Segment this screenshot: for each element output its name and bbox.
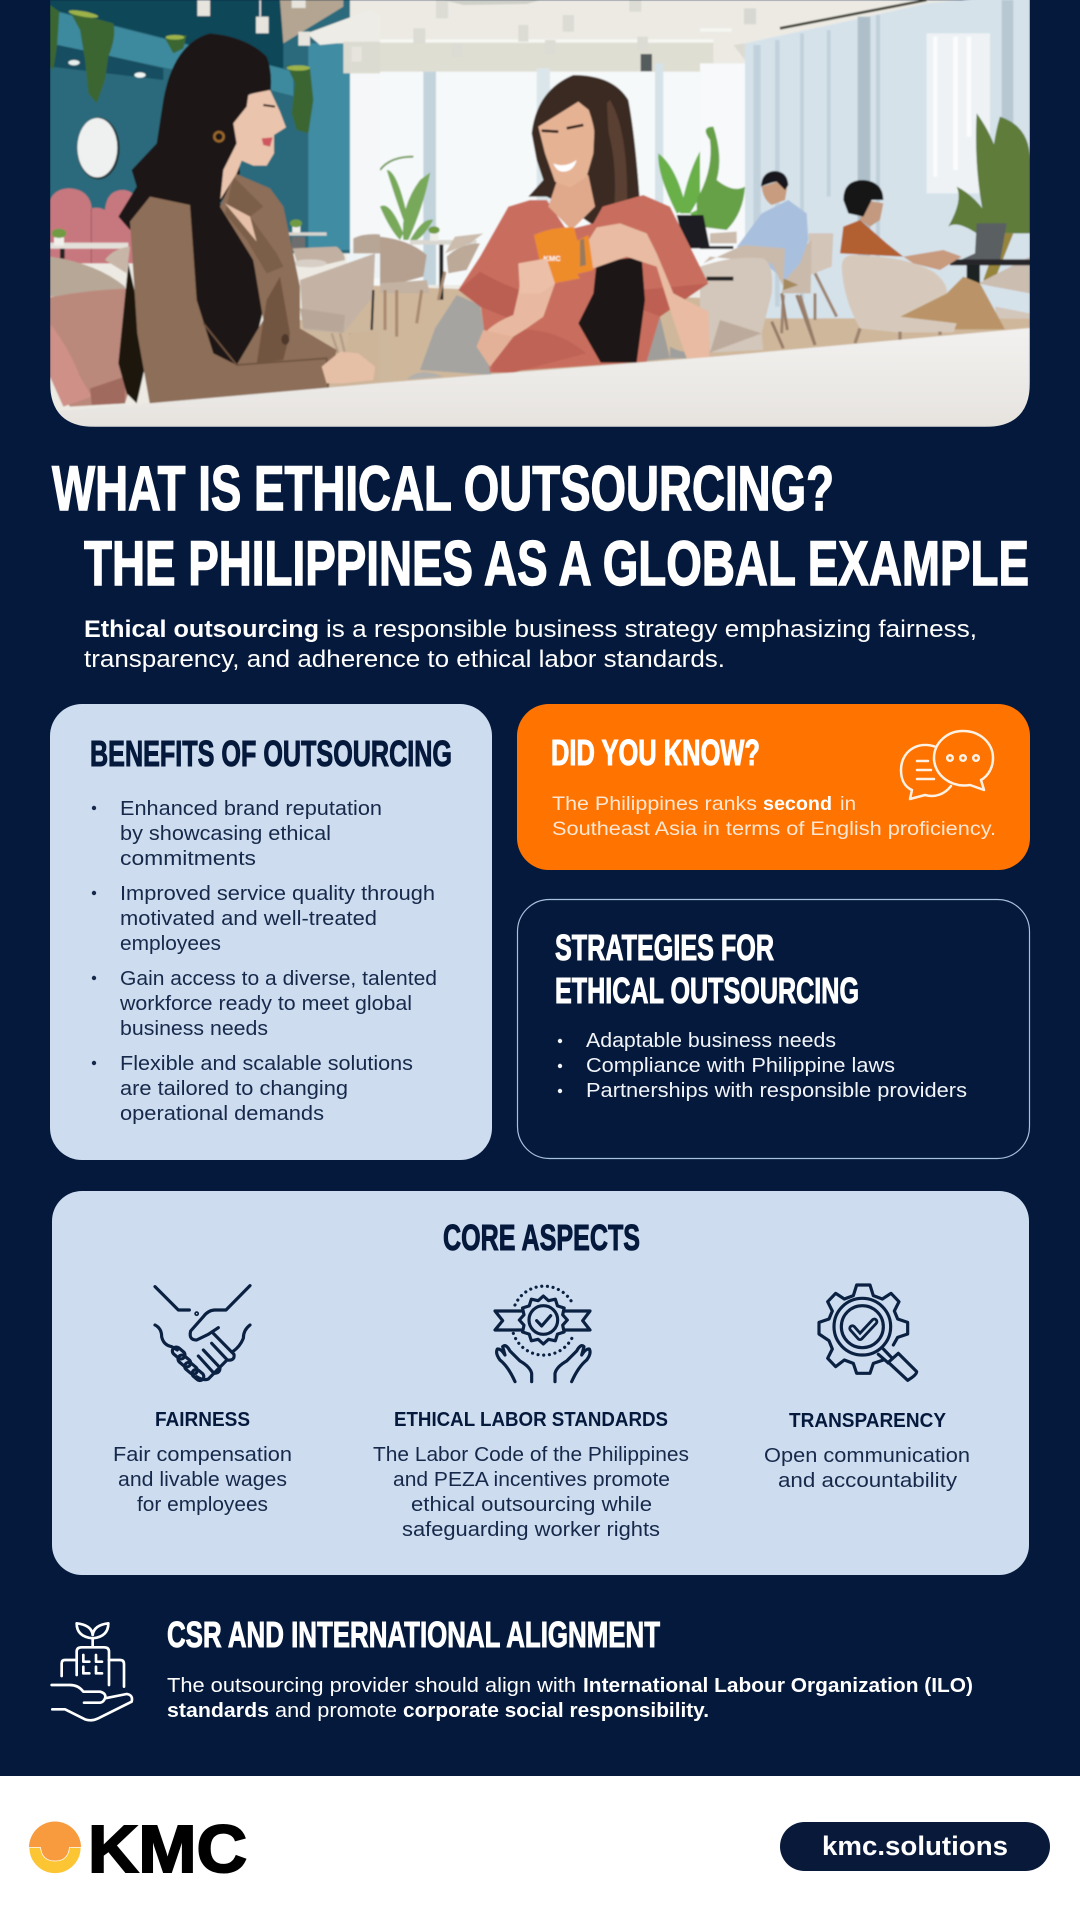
pink chair bbox=[50, 288, 137, 407]
panel: benefits of outsourcing bbox=[50, 704, 492, 1160]
heading: did you know: DID YOU KNOW? bbox=[551, 732, 760, 773]
hair behind bbox=[528, 75, 642, 230]
strategies bullet list: Partnerships with responsible providers bbox=[586, 1080, 967, 1102]
laptop at blue shirt man bbox=[700, 217, 708, 247]
floor bbox=[354, 285, 1030, 383]
did you know fact bbox=[552, 793, 996, 840]
hero photo: two women talking in a cafe-style office bbox=[50, 0, 1030, 427]
did you know fact: second bbox=[763, 793, 832, 815]
center woman and chair bbox=[380, 75, 710, 379]
teal wall section bbox=[50, 0, 380, 263]
center woman and chair: KMC bbox=[543, 254, 561, 263]
heading: benefits: BENEFITS OF OUTSOURCING bbox=[90, 733, 452, 774]
benefits bullet list: Enhanced brand reputation bbox=[120, 798, 382, 820]
intro paragraph: Ethical outsourcing bbox=[84, 616, 319, 643]
heading: strategies bbox=[555, 927, 859, 1011]
CSR paragraph: corporate social responsibility. bbox=[403, 1700, 709, 1722]
item: fairness: Fair compensation bbox=[113, 1444, 292, 1466]
CSR paragraph: and promote bbox=[275, 1700, 397, 1722]
benefits bullet list: employees bbox=[120, 933, 221, 955]
plant in left window bbox=[380, 170, 433, 240]
icon: gear with magnifying glass and check bbox=[819, 1285, 917, 1380]
grey chair bbox=[420, 295, 492, 375]
neck and face bbox=[548, 175, 595, 230]
item: ethical labor standards: ETHICAL LABOR STANDARDS bbox=[394, 1409, 668, 1431]
back chairs bbox=[808, 233, 833, 275]
benefits bullet list: are tailored to changing bbox=[120, 1078, 348, 1100]
face bbox=[219, 88, 287, 200]
did you know fact: in bbox=[840, 793, 856, 815]
item: ethical labor standards: The Labor Code of the Philippines bbox=[373, 1444, 689, 1466]
wall mirror bbox=[77, 117, 120, 179]
CSR paragraph: standards bbox=[167, 1700, 269, 1722]
icon: certified medal held by hands bbox=[495, 1286, 590, 1382]
CSR paragraph: The outsourcing provider should align with bbox=[167, 1675, 576, 1697]
white table bbox=[149, 327, 1030, 406]
CSR paragraph bbox=[167, 1675, 973, 1722]
panel: did you know bbox=[517, 704, 1030, 870]
footer band bbox=[0, 1776, 1080, 1920]
CSR paragraph: International Labour Organization (ILO) bbox=[583, 1675, 973, 1697]
strategies bullet list: Compliance with Philippine laws bbox=[586, 1055, 895, 1077]
laptop behind bbox=[677, 215, 710, 248]
benefits bullet list: Improved service quality through bbox=[120, 883, 435, 905]
icon: plant, building and hand bbox=[52, 1623, 132, 1720]
hanging plants bbox=[50, 5, 313, 133]
item: fairness: FAIRNESS bbox=[155, 1409, 250, 1431]
KMC logo: KMC bbox=[88, 1812, 247, 1887]
hands bbox=[322, 352, 375, 383]
item: fairness bbox=[113, 1409, 292, 1516]
strategies bullet list: Adaptable business needs bbox=[586, 1030, 836, 1052]
long hair bbox=[578, 257, 645, 363]
benefits bullet list: commitments bbox=[120, 848, 256, 870]
back chairs and table bbox=[380, 237, 427, 290]
item: ethical labor standards: safeguarding worker rights bbox=[402, 1519, 660, 1541]
benefits bullet list: workforce ready to meet global bbox=[119, 993, 412, 1015]
curtain section bbox=[697, 0, 1030, 353]
item: fairness: for employees bbox=[137, 1494, 268, 1516]
chairs behind left woman bbox=[50, 257, 125, 298]
chair front bbox=[700, 258, 772, 353]
item: ethical labor standards bbox=[373, 1409, 689, 1541]
orange shirt man pants and chair bbox=[900, 277, 1005, 329]
item: transparency: TRANSPARENCY bbox=[789, 1410, 947, 1432]
pink bench bbox=[50, 188, 136, 263]
item: ethical labor standards: and PEZA incentives promote bbox=[393, 1469, 670, 1491]
front hair lock bbox=[588, 104, 609, 131]
heading: strategies: ETHICAL OUTSOURCING bbox=[555, 970, 859, 1011]
website pill bbox=[780, 1822, 1050, 1871]
panel: strategies for ethical outsourcing bbox=[518, 900, 1030, 1158]
KMC logo bbox=[29, 1812, 247, 1887]
benefits bullet list: business needs bbox=[120, 1018, 268, 1040]
benefits bullet list: operational demands bbox=[120, 1103, 324, 1125]
heading: core aspects: CORE ASPECTS bbox=[443, 1217, 640, 1258]
item: fairness: and livable wages bbox=[118, 1469, 287, 1491]
benefits bullet list: by showcasing ethical bbox=[120, 823, 331, 845]
laptop at orange shirt man bbox=[957, 223, 1007, 262]
heading: CSR and international alignment: CSR AND INTERNATIONAL ALIGNMENT bbox=[167, 1614, 660, 1655]
man in blue shirt bbox=[737, 200, 808, 280]
plant in right window bbox=[657, 151, 702, 216]
item: transparency: Open communication bbox=[764, 1445, 970, 1467]
intro paragraph: is a responsible business strategy emphasizing fairness, bbox=[326, 616, 977, 643]
right arm bbox=[583, 223, 710, 358]
did you know fact: The Philippines ranks bbox=[552, 793, 757, 815]
blouse bbox=[458, 195, 708, 373]
strategies bullet list bbox=[558, 1030, 967, 1102]
icon: handshake bbox=[155, 1286, 250, 1382]
item: ethical labor standards: ethical outsourcing while bbox=[411, 1494, 652, 1516]
intro paragraph bbox=[84, 616, 977, 673]
website pill: kmc.solutions bbox=[822, 1831, 1008, 1861]
item: transparency bbox=[764, 1410, 970, 1492]
benefits bullet list: motivated and well-treated bbox=[120, 908, 377, 930]
item: transparency: and accountability bbox=[778, 1470, 957, 1492]
palm plant bbox=[948, 113, 1030, 233]
title bbox=[52, 454, 1029, 599]
back hair bbox=[118, 33, 271, 365]
heading: strategies: STRATEGIES FOR bbox=[555, 927, 774, 968]
benefits bullet list: Flexible and scalable solutions bbox=[120, 1053, 413, 1075]
left section foreground bbox=[50, 33, 380, 407]
did you know fact: Southeast Asia in terms of English proficiency. bbox=[552, 818, 996, 840]
icon: chat bubbles bbox=[901, 731, 993, 799]
benefits bullet list bbox=[92, 798, 437, 1125]
panel: core aspects bbox=[52, 1191, 1029, 1575]
window and ceiling section bbox=[347, 0, 713, 285]
forearm and mug hand bbox=[486, 284, 556, 338]
jacket bbox=[130, 173, 337, 405]
orange mug bbox=[534, 227, 593, 285]
benefits bullet list: Gain access to a diverse, talented bbox=[120, 968, 437, 990]
intro paragraph: transparency, and adherence to ethical labor standards. bbox=[84, 646, 725, 673]
man in orange shirt bbox=[840, 220, 903, 257]
